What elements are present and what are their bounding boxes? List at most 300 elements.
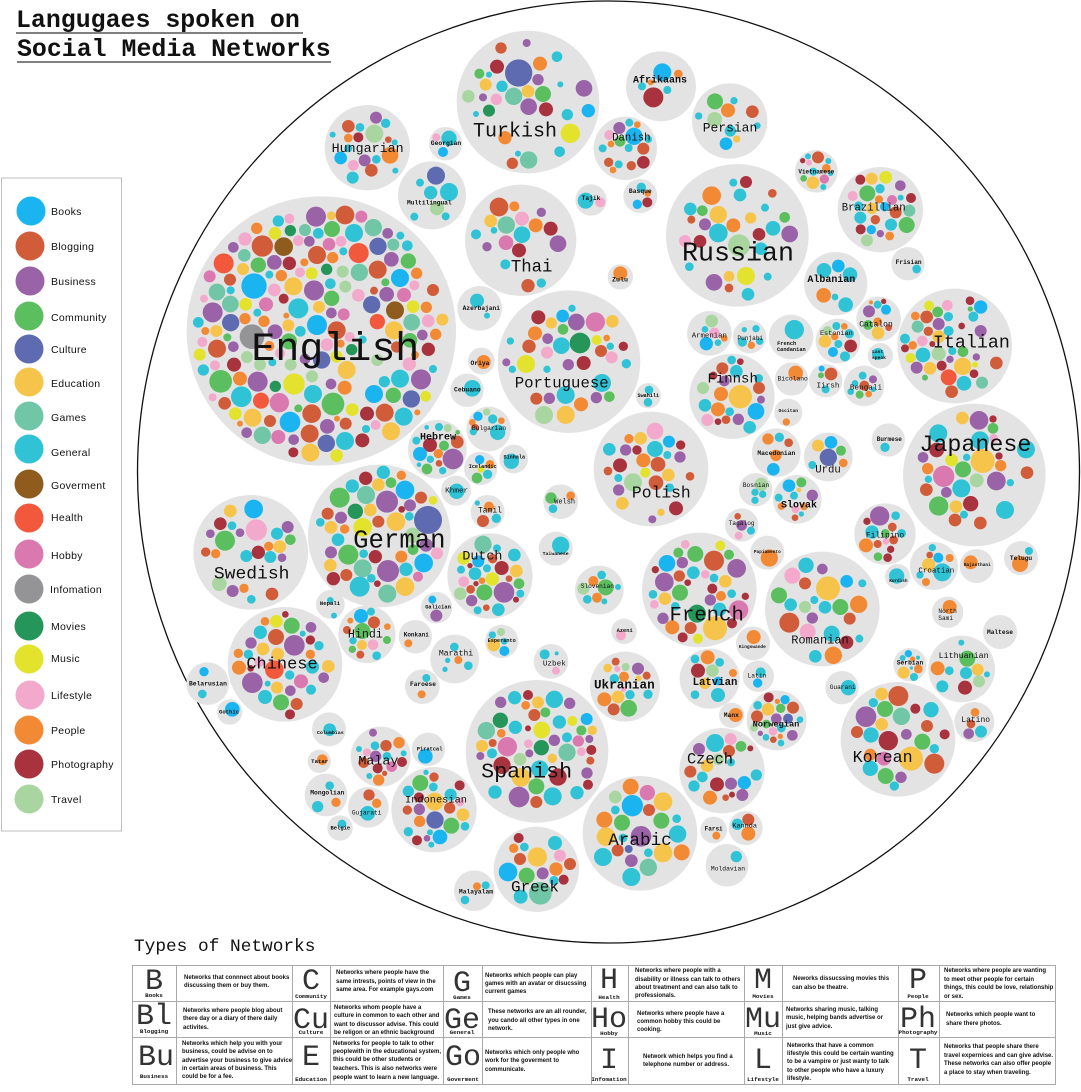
bubble: Tatar: [308, 750, 331, 773]
bubble: Khmer: Khmer: [445, 487, 468, 495]
legend: Business: [51, 276, 96, 288]
bubble: Hungarian: Hungarian: [332, 142, 404, 157]
bubble: Polish: [594, 412, 708, 526]
bubble: Oriya: [468, 348, 495, 374]
bubble: Bicolano: Bicolano: [777, 376, 808, 383]
bubble: Portuguese: Portuguese: [515, 375, 609, 393]
table letters: Blogging: [140, 1028, 169, 1035]
table descriptions: can also be theatre.: [792, 985, 848, 991]
bubble: Azerbajani: Azerbajani: [463, 305, 500, 312]
bubble: Filipino: [854, 503, 916, 565]
bubble: Thai: [465, 185, 576, 296]
table descriptions: business, could be advise on to: [182, 1049, 273, 1055]
bubble: Malay: Malay: [358, 755, 398, 770]
bubble: Kannda: Kannda: [732, 823, 757, 831]
bubble: Ukranian: [590, 652, 660, 722]
bubble: Swahili: [636, 383, 661, 408]
legend: People: [51, 725, 86, 737]
network types table: [132, 964, 1056, 1085]
bubble: Lithuanian: [928, 636, 995, 702]
table descriptions: Networks where people are wanting: [944, 968, 1046, 974]
bubble: German: [308, 465, 451, 607]
bubble: Manx: Manx: [724, 712, 739, 719]
bubble: Korean: [841, 682, 955, 797]
bubble: Japanese: Japanese: [919, 433, 1031, 459]
bubble: Telugu: Telugu: [1010, 555, 1032, 562]
table descriptions: Networks which people want to: [946, 1012, 1036, 1018]
bubble: French Candanian: French: [777, 341, 796, 347]
bubble: Galician: [421, 592, 452, 623]
bubble: Frisian: Frisian: [896, 259, 922, 266]
table descriptions: activites.: [183, 1025, 209, 1031]
bubble: Georgian: Georgian: [431, 140, 461, 147]
bubble: Basque: [623, 179, 657, 213]
bubble: Tamil: [471, 495, 505, 529]
bubble: Tajik: Tajik: [582, 195, 601, 202]
table letters: Ph: [900, 1003, 936, 1037]
table letters: Music: [754, 1030, 772, 1037]
table descriptions: be religon or an ethnic background: [334, 1030, 435, 1036]
table descriptions: to be a vampire or just wanty to talk: [787, 1059, 890, 1065]
legend: Books: [51, 206, 82, 218]
table descriptions: Networks where people have the: [336, 970, 430, 976]
legend: Photography: [51, 759, 114, 771]
bubble: Papiamento: Papiamento: [754, 549, 781, 555]
bubble: Occitan: [774, 399, 802, 427]
table letters: Games: [453, 994, 471, 1001]
bubble: Farsi: [700, 817, 727, 843]
table letters: L: [754, 1044, 772, 1078]
table descriptions: Neworks dissucssing movies this: [793, 976, 890, 982]
bubble: Gujarati: Gujarati: [352, 810, 382, 817]
bubble: Malayalam: Malayalam: [459, 888, 493, 895]
bubble: Estonian: [816, 319, 860, 363]
bubble: Chinese: Chinese: [246, 655, 318, 674]
bubble: Cebuano: [450, 374, 484, 407]
bubble: Uzbek: Uzbek: [543, 661, 566, 669]
bubble: Norwegian: Norwegian: [753, 720, 799, 730]
bubble: Azeni: Azeni: [617, 628, 633, 634]
bubble: Galician: Galician: [425, 605, 451, 611]
bubble: Finnsh: [689, 354, 775, 439]
bubble: Hungarian: [325, 105, 410, 190]
bubble: Romanian: [765, 552, 880, 666]
bubble: Spanish: [466, 680, 608, 823]
bubble: Kingswande: Kingswande: [739, 644, 766, 650]
table descriptions: or sex.: [944, 994, 964, 1000]
bubble: Moldavian: Moldavian: [711, 866, 745, 873]
table descriptions: Networks where people have a: [637, 1011, 725, 1017]
table letters: Cu: [293, 1004, 329, 1038]
table letters: Education: [295, 1076, 327, 1083]
bubble: Bulgarian: [466, 407, 511, 451]
bubble: Persian: Persian: [703, 121, 757, 136]
bubble: Last Speak: [868, 343, 893, 368]
bubble: Basque: Basque: [629, 188, 652, 195]
bubble: Kurdish: [885, 564, 910, 589]
bubble: Belgie: [327, 815, 353, 841]
table letters: Health: [598, 994, 620, 1001]
table descriptions: just give advice.: [785, 1024, 833, 1030]
bubble: Albanian: Albanian: [807, 274, 855, 285]
bubble: Manx: [719, 703, 744, 728]
bubble: Romanian: Romanian: [791, 634, 849, 648]
bubble: Chinese: [228, 607, 342, 722]
table descriptions: same area. For example gays.com: [336, 987, 433, 993]
bubble: Mongolian: [305, 774, 347, 816]
table descriptions: discussing them or buy them.: [184, 983, 269, 989]
legend: Community: [51, 312, 107, 324]
table descriptions: network.: [488, 1026, 513, 1032]
bubble: Esperanto: [485, 625, 518, 658]
bubble: Swahili: Swahili: [637, 393, 659, 399]
bubble: Dutch: [447, 533, 533, 619]
bubble: Azerbajani: [457, 286, 502, 331]
table descriptions: about treatment and can also talk to: [635, 985, 738, 991]
table letters: M: [754, 964, 772, 998]
bubble: Latin: Latin: [747, 673, 767, 680]
bubble: Latvian: [680, 649, 740, 709]
table descriptions: advertise your business to give advice: [182, 1058, 293, 1064]
bubble: Last Speak: Last: [872, 349, 883, 355]
bubble: Dutch: Dutch: [462, 549, 502, 564]
table descriptions: lifestyle.: [787, 1076, 811, 1082]
bubble: Armenian: Armenian: [692, 333, 727, 341]
bubble: Belarusian: Belarusian: [189, 681, 227, 688]
bubble: Latvian: Latvian: [693, 677, 737, 689]
table letters: Bl: [136, 1000, 172, 1034]
table letters: E: [302, 1041, 320, 1075]
table letters: C: [302, 965, 320, 999]
bubble: Korean: Korean: [853, 749, 913, 768]
bubble: Nepali: [316, 590, 345, 619]
bubble: Guarani: [825, 671, 859, 704]
legend: Infomation: [50, 584, 102, 596]
table letters: Bu: [138, 1041, 174, 1075]
table descriptions: work for the goverment to: [484, 1058, 559, 1064]
table descriptions: Networks which help you with your: [182, 1041, 283, 1047]
bubble: Tagalog: [725, 508, 758, 542]
table letters: Business: [140, 1073, 169, 1080]
bubble: Georgian: [429, 127, 462, 160]
table letters: Culture: [299, 1029, 324, 1036]
table descriptions: disability or illness can talk to others: [635, 977, 741, 983]
table letters: G: [453, 967, 471, 1001]
legend: Movies: [51, 621, 86, 633]
table descriptions: communicate.: [485, 1067, 526, 1073]
table descriptions: Networks whom people have a: [334, 1005, 422, 1011]
table descriptions: this could be other students or: [333, 1057, 422, 1063]
bubble: Brazillian: Brazillian: [842, 203, 906, 215]
legend: Music: [51, 653, 80, 665]
table letters: Books: [145, 992, 163, 999]
table letters: Mu: [745, 1003, 781, 1037]
table letters: I: [600, 1044, 618, 1078]
bubble: Turkish: [457, 31, 599, 173]
bubble: Czech: Czech: [687, 750, 733, 768]
bubble: Faroese: Faroese: [410, 681, 436, 688]
bubble: Malay: [351, 727, 411, 787]
bubble: Malayalam: [454, 870, 495, 911]
bubble: Portuguese: [498, 290, 640, 433]
table letters: Movies: [752, 993, 774, 1000]
bubble: Iirsh: [809, 364, 842, 397]
legend: Hobby: [51, 550, 83, 562]
bubble: Sinhala: Sinhala: [503, 454, 525, 460]
bubble: Latino: Latino: [961, 716, 990, 725]
table descriptions: same intrests, points of view in the: [336, 979, 436, 985]
bubble: German: German: [353, 526, 446, 555]
table descriptions: professionals.: [635, 993, 676, 999]
table letters: Lifestyle: [747, 1076, 779, 1083]
bubble: Mongolian: Mongolian: [310, 790, 345, 797]
table letters: Travel: [907, 1076, 929, 1083]
bubble: Welsh: [543, 484, 578, 519]
table descriptions: travel expernices and can give advise.: [944, 1053, 1053, 1059]
bubble: Indonesian: Indonesian: [405, 795, 467, 807]
table letters: Goverment: [447, 1076, 479, 1083]
bubble: Columbias: Columbias: [317, 730, 344, 736]
legend: Blogging: [51, 241, 94, 253]
table descriptions: music, helping bands advertise or: [786, 1015, 884, 1021]
table descriptions: games with an avatar or disucssing: [485, 981, 587, 987]
table descriptions: to meet other people for certain: [944, 977, 1034, 983]
bubble: Belarusian: [186, 662, 229, 705]
table descriptions: Networks where people blog about: [183, 1008, 282, 1014]
bubble: Bengali: Bengali: [850, 384, 882, 392]
table descriptions: teachers. This is also networks were: [333, 1066, 438, 1072]
bubble: Moldavian: [706, 844, 748, 887]
table letters: P: [909, 964, 927, 998]
bubble: Uzbek: [534, 644, 568, 679]
bubble: Macedonian: [752, 428, 801, 477]
bubble: Guarani: Guarani: [830, 684, 856, 691]
bubble: Hebrew: Hebrew: [420, 431, 456, 442]
bubble: Japanese: [903, 404, 1046, 546]
table letters: B: [145, 965, 163, 999]
bubble: Multilingual: [398, 161, 466, 229]
bubble: Columbias: [312, 712, 346, 746]
bubble: North Sami: [932, 597, 963, 628]
bubble: Arabic: [583, 776, 697, 891]
table descriptions: Networks that have a common: [787, 1043, 874, 1049]
bubble: Danish: [594, 117, 657, 180]
bubble: Italian: [897, 289, 1012, 403]
bubble: Thai: Thai: [511, 259, 552, 278]
bubble: Maltese: [983, 615, 1017, 649]
bubble: Cebuano: Cebuano: [454, 387, 481, 394]
title: [16, 7, 331, 64]
legend: Culture: [51, 344, 87, 356]
table descriptions: common hobby this could be: [637, 1019, 721, 1025]
bubble: Belgie: Belgie: [330, 825, 351, 832]
bubble: Nepali: Nepali: [320, 600, 341, 607]
bubble: Icelandic: [464, 452, 497, 485]
bubble: Last Speak: speak: [872, 355, 886, 361]
bubble: Konkani: [399, 620, 432, 653]
bubble: Bosnian: Bosnian: [743, 482, 769, 489]
bubble: Slovak: Slovak: [781, 500, 817, 511]
bubble: Tamil: Tamil: [478, 507, 502, 516]
bubble: Gujarati: [348, 787, 389, 828]
table letters: Infomation: [591, 1076, 627, 1083]
bubble: Taiwanese: Taiwanese: [543, 551, 569, 557]
bubble: Papiamento: [750, 536, 784, 570]
table letters: [136, 964, 938, 1083]
bubble: Konkani: Konkani: [404, 632, 429, 639]
legend: Travel: [51, 794, 82, 806]
bubble: Bengali: [844, 366, 884, 406]
bubble: Urdu: [804, 433, 853, 481]
table letters: Community: [295, 993, 327, 1000]
bubble: Bicolano: [775, 362, 808, 396]
legend: Lifestyle: [51, 690, 92, 702]
bubble: Hindi: [338, 606, 396, 663]
bubble: Burmese: [872, 423, 905, 457]
bubble: Piratcal: [412, 733, 445, 766]
bubble: Albanian: [804, 252, 867, 315]
table descriptions: telephone number or address.: [643, 1062, 729, 1068]
legend: Games: [51, 412, 86, 424]
table letters: H: [600, 964, 618, 998]
table descriptions: a place to stay when traveling.: [944, 1070, 1031, 1076]
bubble: Oriya: Oriya: [470, 360, 490, 367]
bubble: Esperanto: Esperanto: [488, 638, 516, 644]
bubble: Serbian: Serbian: [897, 660, 923, 667]
bubble: Hebrew: [408, 420, 467, 479]
bubble: Faroese: [405, 669, 440, 704]
bubble: Greek: [494, 827, 579, 912]
table descriptions: you cando all other types in one: [488, 1018, 580, 1024]
bubble: English: English: [251, 328, 419, 373]
legend: Health: [51, 512, 83, 524]
table letters: Photography: [899, 1029, 938, 1036]
table descriptions: Networks for people to talk to other: [333, 1041, 435, 1047]
bubble: Telugu: [1004, 541, 1038, 575]
table descriptions: Networks which people can play: [485, 973, 578, 979]
bubble: Latin: [743, 661, 774, 692]
bubble: Sinhala: [499, 445, 528, 473]
table letters: General: [450, 1029, 475, 1036]
table letters: Hobby: [600, 1030, 618, 1037]
bubble: Norwegian: [747, 690, 807, 750]
bubble: Maltese: Maltese: [987, 629, 1013, 636]
bubble chart: [186, 31, 1046, 912]
bubble: Punjabi: Punjabi: [737, 335, 764, 342]
table descriptions: Network which helps you find a: [643, 1054, 733, 1060]
bubble: Polish: Polish: [632, 484, 691, 503]
table descriptions: Networks that people share there: [944, 1044, 1039, 1050]
bubble: Multilingual: Multilingual: [407, 200, 452, 207]
bubble: Marathi: Marathi: [439, 649, 473, 659]
bubble: Macedonian: Macedonian: [757, 450, 796, 457]
bubble: Croatian: [910, 542, 958, 590]
bubble: Bulgarian: Bulgarian: [472, 425, 506, 432]
bubble: Tajik: [575, 184, 607, 216]
bubble: Vietnamese: Vietnamese: [798, 169, 835, 176]
bubble: Tatar: Tatar: [311, 758, 328, 765]
bubble: Iirsh: Iirsh: [817, 383, 839, 391]
table descriptions: [182, 968, 1054, 1082]
bubble: Farsi: Farsi: [705, 826, 723, 833]
table descriptions: want to discussor advise. This could: [333, 1022, 439, 1028]
bubble: Bosnian: [739, 473, 772, 506]
bubble: French Candanian: [769, 315, 813, 359]
bubble: Finnsh: Finnsh: [707, 371, 758, 387]
legend: Goverment: [51, 480, 106, 492]
table letters: People: [907, 993, 929, 1000]
bubble: North Sami: Sami: [938, 615, 953, 622]
bubble: Marathi: [430, 635, 479, 683]
bubble: Danish: Danish: [612, 132, 651, 144]
bubble: Swedish: [193, 495, 308, 610]
legend: Education: [51, 378, 100, 390]
bubble: French Candanian: Candanian: [777, 347, 806, 353]
bubble: Filipino: Filipino: [866, 531, 904, 540]
bubble: Vietnamese: [795, 150, 838, 193]
title: Langugaes spoken on: [16, 7, 300, 35]
table descriptions: lifestyle this could be certain wanting: [787, 1051, 894, 1057]
bubble: Welsh: Welsh: [554, 499, 575, 507]
table descriptions: peoplewith in the educational system,: [333, 1049, 441, 1055]
bubble: Estonian: Estonian: [820, 330, 853, 338]
bubble: Latino: [954, 702, 994, 742]
bubble: Greek: Greek: [511, 879, 559, 897]
bubble: Burmese: Burmese: [877, 436, 902, 443]
table descriptions: current games: [485, 989, 527, 995]
bubble: Czech: [679, 728, 765, 813]
table descriptions: things, this could be love, relationship: [944, 985, 1054, 991]
table descriptions: could be for a fee.: [182, 1074, 234, 1080]
bubble: Armenian: [687, 311, 732, 356]
table descriptions: Networks sharing music, talking: [786, 1007, 878, 1013]
bubble: Tagalog: Tagalog: [729, 520, 755, 527]
title: Social Media Networks: [17, 36, 331, 64]
bubble: Punjabi: [733, 320, 766, 353]
table descriptions: cooking.: [637, 1027, 662, 1033]
table descriptions: there day or a diary of there daily: [183, 1016, 278, 1022]
bubble: French: [642, 533, 757, 647]
bubble: Kannda: [729, 811, 763, 845]
table descriptions: Networks where people with a: [635, 968, 721, 974]
bubble: English: [187, 196, 456, 466]
bubble: Catalon: [856, 297, 901, 341]
bubble: Icelandic: Icelandic: [469, 464, 497, 470]
bubble: Urdu: Urdu: [815, 464, 841, 476]
bubble: Croatian: Croatian: [918, 568, 954, 576]
legend: [2, 178, 122, 831]
bubble: Kurdish: Kurdish: [889, 579, 908, 584]
bubble: Frisian: [891, 247, 925, 280]
bubble: Ukranian: Ukranian: [594, 677, 655, 692]
heading: Types of Networks: Types of Networks: [134, 937, 315, 957]
bubble: Russian: [666, 164, 809, 307]
bubble: French: French: [669, 605, 744, 628]
bubble: Gothic: Gothic: [219, 709, 239, 716]
bubble: Slovenian: [575, 566, 624, 614]
bubble: Hindi: Hindi: [348, 627, 383, 641]
bubble: Turkish: Turkish: [473, 121, 557, 144]
bubble: Afrikaans: [626, 51, 696, 121]
table descriptions: These networks can also offer people: [944, 1061, 1052, 1067]
table descriptions: Networks which only people who: [485, 1050, 580, 1056]
bubble: Afrikaans: Afrikaans: [633, 75, 687, 86]
bubble: Slovenian: Slovenian: [581, 583, 614, 590]
bubble: Gothic: [217, 699, 242, 725]
bubble: Spanish: Spanish: [481, 759, 572, 784]
table letters: Ho: [591, 1003, 627, 1037]
table descriptions: share there photos.: [946, 1021, 1002, 1027]
